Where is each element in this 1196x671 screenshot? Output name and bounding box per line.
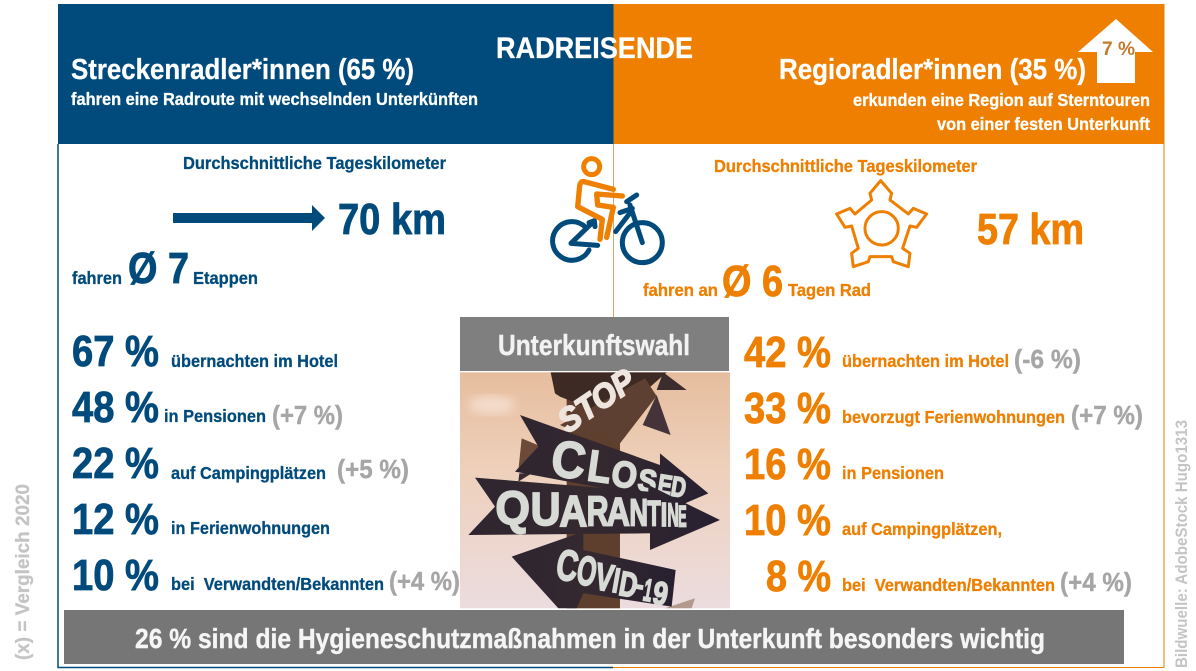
list: left accommodation: (+5 %) (337, 454, 409, 484)
panel: right frame (613, 144, 1164, 668)
panel: left header (58, 4, 614, 144)
illustration: signpost: A (607, 490, 630, 534)
illustration: signpost: O (609, 452, 640, 497)
illustration: signpost: A (559, 487, 587, 536)
divider line (612, 144, 614, 318)
panel: left frame (58, 144, 613, 668)
text: fahren Ø 7 Etappen: fahren (72, 268, 122, 288)
list: left accommodation: bei Verwandten/Bekannten (171, 574, 384, 594)
list: right accommodation: (-6 %) (1014, 344, 1081, 374)
illustration: signpost: T (647, 494, 661, 533)
illustration: signpost: I (610, 562, 623, 601)
text: fahren an Ø 6 Tagen Rad: Tagen Rad (788, 280, 871, 300)
list: right accommodation: (+4 %) (1060, 567, 1132, 597)
icon: cyclist (553, 159, 662, 263)
list: left accommodation: übernachten im Hotel (171, 351, 338, 371)
list: left accommodation: (+4 %) (389, 566, 460, 596)
illustration: signpost: E (678, 501, 687, 534)
text: fahren an Ø 6 Tagen Rad: Ø 6 (722, 257, 783, 306)
illustration: signpost: L (585, 441, 615, 493)
illustration: signpost: V (592, 556, 617, 601)
list: left accommodation (72, 327, 460, 600)
illustration: signpost: 1 (641, 572, 655, 608)
text: right subheading line 1: erkunden eine Region auf Sterntouren (853, 90, 1150, 110)
note: image source: Bildwuelle: AdobeStock Hugo1313 (1172, 420, 1191, 668)
list: right accommodation: 10 % (744, 496, 831, 545)
text: fahren Ø 7 Etappen: Ø 7 (128, 244, 189, 293)
illustration: signpost: D (669, 471, 688, 504)
list: left accommodation: 48 % (72, 383, 159, 432)
illustration: signpost: E (656, 469, 674, 501)
list: right accommodation: auf Campingplätzen, (842, 519, 1002, 539)
callout: bottom bar (64, 610, 1124, 664)
list: left accommodation: 12 % (72, 495, 159, 544)
text: fahren an Ø 6 Tagen Rad: fahren an (643, 280, 718, 300)
illustration: signpost: D (616, 565, 641, 606)
callout: bottom bar: 26 % sind die Hygieneschutzmaßnahmen in der Unterkunft besonders wichtig (135, 623, 1045, 654)
title: RADREISENDE (496, 32, 693, 65)
number: 70 km: 70 km (338, 195, 446, 244)
illustration: signpost: 9 (650, 574, 671, 613)
text: fahren Ø 7 Etappen: Etappen (193, 268, 258, 288)
illustration: signpost: N (629, 492, 648, 534)
icon: long arrow (173, 205, 325, 231)
list: right accommodation: 16 % (744, 440, 831, 489)
number: 57 km: 57 km (977, 205, 1084, 254)
illustration: signpost (460, 362, 730, 613)
list: right accommodation (744, 328, 1143, 601)
list: right accommodation: 42 % (744, 328, 831, 377)
list: left accommodation: 67 % (72, 327, 159, 376)
icon: star route (837, 181, 927, 267)
heading: Streckenradler: Streckenradler*innen (65 %) (71, 54, 414, 86)
text: fahren Ø 7 Etappen (72, 244, 258, 293)
illustration: signpost: U (531, 483, 561, 535)
list: left accommodation: in Pensionen (164, 406, 266, 426)
list: right accommodation: (+7 %) (1071, 400, 1143, 430)
list: right accommodation: in Pensionen (842, 463, 944, 483)
panel: right header (614, 4, 1164, 144)
list: right accommodation: übernachten im Hotel (842, 351, 1009, 371)
illustration: signpost: S (636, 462, 659, 500)
list: right accommodation: bei Verwandten/Bekannten (842, 575, 1055, 595)
icon: up arrow with 7 %: 7 % (1102, 39, 1135, 60)
text: left subheading: fahren eine Radroute mit wechselnden Unterkünften (71, 89, 478, 109)
illustration: signpost: Q (495, 482, 530, 535)
illustration: signpost: N (667, 497, 679, 533)
text: fahren an Ø 6 Tagen Rad (643, 257, 871, 306)
illustration: signpost: O (573, 547, 600, 596)
list: left accommodation: auf Campingplätzen (171, 463, 326, 483)
heading: Unterkunftswahl: Unterkunftswahl (498, 330, 690, 362)
illustration: signpost: R (587, 488, 609, 534)
illustration: signpost: C (553, 541, 582, 592)
illustration: signpost: STOP (551, 362, 643, 441)
list: left accommodation: 22 % (72, 439, 159, 488)
illustration: signpost: C (548, 428, 590, 491)
icon: up arrow with 7 % (1078, 19, 1153, 83)
illustration: signpost: - (634, 570, 646, 600)
heading: Regioradler: Regioradler*innen (35 %) (779, 54, 1086, 86)
list: left accommodation: (+7 %) (272, 400, 343, 430)
list: right accommodation: bevorzugt Ferienwohnungen (842, 407, 1065, 427)
note: comparison year: (x) = Vergleich 2020 (13, 484, 34, 660)
list: left accommodation: 10 % (72, 551, 159, 600)
text: right subheading line 2: von einer festen Unterkunft (937, 114, 1150, 134)
list: right accommodation: 8 % (766, 552, 831, 601)
text: left daily km label: Durchschnittliche Tageskilometer (183, 153, 446, 173)
text: right daily km label: Durchschnittliche Tageskilometer (714, 156, 977, 176)
heading: Unterkunftswahl (460, 317, 729, 371)
list: right accommodation: 33 % (744, 384, 831, 433)
illustration: signpost: I (661, 497, 667, 534)
list: left accommodation: in Ferienwohnungen (171, 518, 330, 538)
